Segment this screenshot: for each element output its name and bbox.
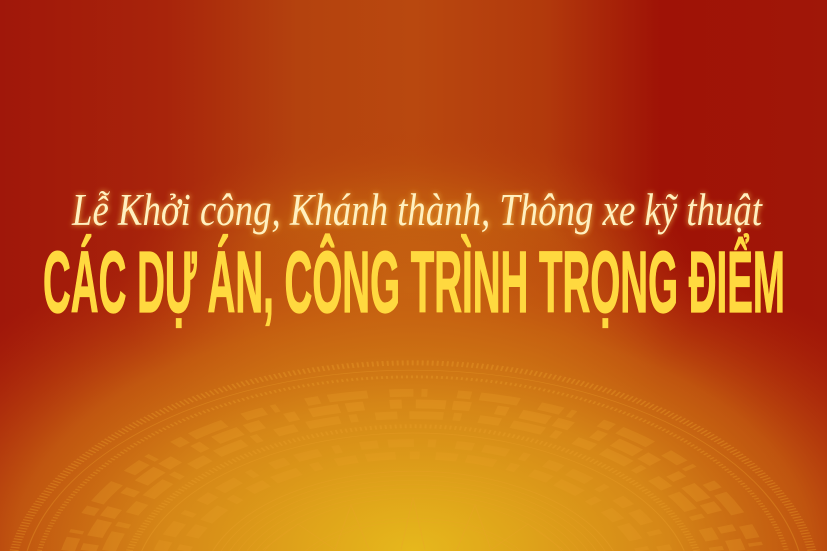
bronze drum pattern — [14, 363, 812, 551]
